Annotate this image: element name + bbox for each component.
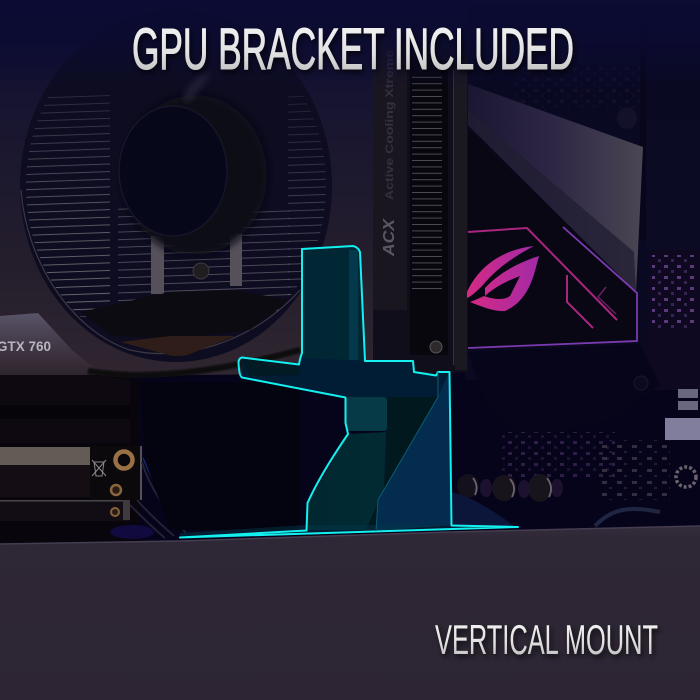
edge highlight [468, 227, 637, 348]
heatsink shadow band [468, 110, 636, 292]
fan assembly [20, 60, 332, 362]
heatsink lit fins [468, 84, 643, 292]
socket ring [676, 467, 696, 487]
blue glow [110, 525, 154, 539]
recycle icon [92, 460, 106, 476]
ACX side of card [373, 40, 468, 372]
card screw [430, 341, 442, 353]
motherboard components [452, 255, 700, 527]
capacitors [457, 474, 563, 502]
heatsink dark face [468, 127, 638, 350]
right dark cable [595, 509, 660, 526]
lower card [0, 501, 130, 521]
PCIe area left [0, 375, 186, 545]
shelf left face [241, 358, 300, 376]
blue cable [452, 492, 515, 527]
bracket shelf [241, 358, 449, 397]
bracket base [180, 525, 518, 537]
fan bottom bracket [80, 290, 290, 340]
bracket tab fold [349, 250, 358, 360]
pink trim lines [468, 228, 617, 328]
heatsink bolt [634, 376, 648, 390]
GPU bracket [180, 246, 518, 538]
graphics card shroud [0, 0, 468, 380]
copper base [120, 336, 235, 358]
dark cavity behind bracket [140, 382, 300, 530]
knurled thumb screw [346, 397, 387, 431]
fan hub shadow [123, 95, 267, 255]
gold ring [116, 452, 132, 468]
motherboard upper right area [465, 0, 700, 390]
GTX 760 plate [0, 313, 100, 373]
fan rim lower edge [21, 190, 300, 354]
Active Cooling Xtreme text: Active Cooling Xtreme [384, 50, 396, 200]
ACX text: ACX [381, 218, 398, 257]
GPU bottom edge highlight [88, 350, 300, 375]
small board [90, 446, 142, 500]
inner outline [376, 372, 438, 531]
pink small mark [598, 287, 616, 314]
bracket arm [307, 432, 386, 530]
centre screw [193, 263, 209, 279]
bottom panel [0, 526, 700, 700]
lower heatsink under ROG panel [468, 344, 660, 440]
bracket upright tab [300, 246, 365, 361]
connector [665, 418, 700, 440]
PCIe latch spring [0, 447, 91, 465]
dark area under shelf [366, 397, 438, 531]
ROG logo [467, 246, 539, 311]
fins group [20, 90, 333, 317]
heat pipes [151, 234, 242, 294]
cyan outline [180, 246, 518, 538]
bracket rear pillar [376, 372, 452, 531]
top gradient overlay [0, 0, 700, 90]
ROG heatsink [467, 84, 643, 350]
fan hub [119, 106, 227, 236]
small gold ring [111, 485, 121, 495]
ribbon cables [130, 462, 186, 538]
air streak [186, 74, 208, 100]
